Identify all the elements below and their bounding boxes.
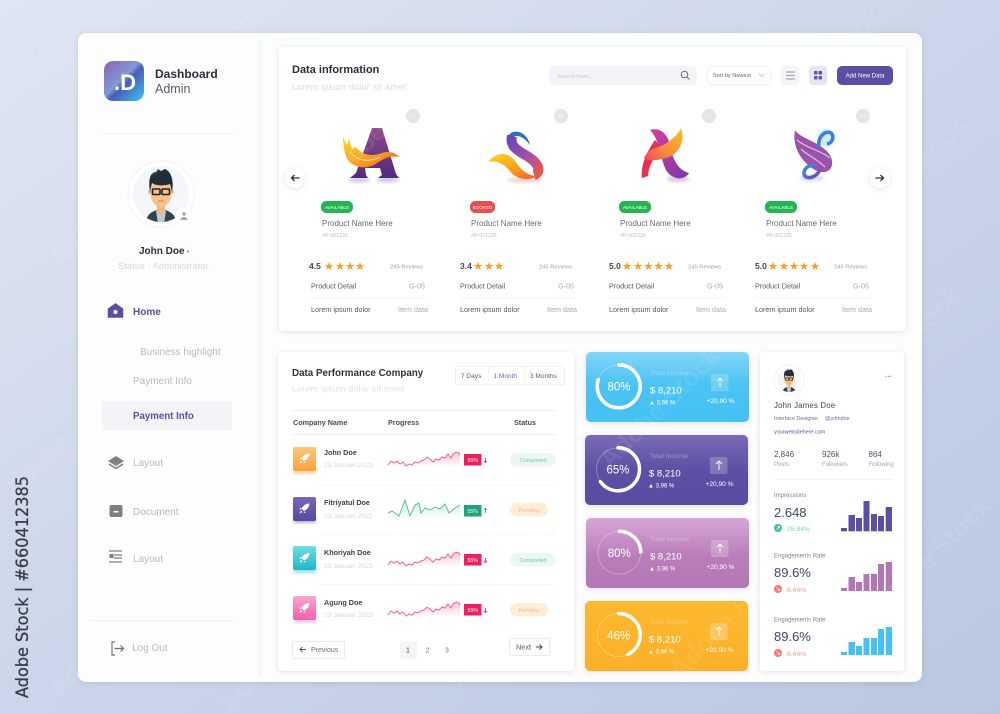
profile name: Status : Administrator	[118, 261, 209, 271]
ring gauge	[597, 614, 640, 656]
status badge	[470, 201, 495, 213]
nav: document: Document	[133, 507, 179, 518]
impressions metric	[774, 493, 892, 533]
ring gauge	[596, 448, 640, 491]
stock watermark: Adobe Stock	[663, 550, 797, 684]
detail rows: Product Detail	[609, 282, 655, 290]
income values: Total Income	[650, 453, 688, 460]
more button	[406, 109, 420, 123]
stock watermark: Adobe Stock	[838, 110, 972, 244]
rating: 245 Reviews	[390, 264, 423, 270]
next button: Next	[516, 642, 531, 652]
nav: layout: Layout	[133, 458, 163, 469]
sidebar	[90, 61, 233, 655]
rating: ★	[633, 259, 643, 273]
income values: ▲ 3,96 %	[649, 400, 676, 406]
change badge	[464, 554, 487, 566]
search box	[549, 66, 697, 85]
detail rows: Item data	[547, 305, 577, 314]
profile stats: 926k	[822, 450, 840, 459]
grid view button	[809, 66, 827, 85]
detail rows: G-05	[707, 282, 723, 290]
product name: Product Name Here	[766, 219, 837, 228]
bar chart	[841, 562, 892, 591]
rating: ★	[799, 259, 809, 273]
row: Khoriyah Doe: Khoriyah Doe	[324, 548, 371, 557]
product card 4	[755, 109, 872, 314]
row: Fitriyatul Doe	[293, 497, 548, 523]
log out	[112, 642, 168, 655]
product name: #R-001235	[620, 233, 646, 239]
rating: ★	[664, 259, 674, 273]
status badge: AVAILABLE	[769, 205, 793, 210]
more button	[856, 109, 870, 123]
more button	[702, 109, 716, 123]
sparkline	[388, 500, 460, 519]
product name: #R-001235	[322, 233, 348, 239]
rating: 245 Reviews	[539, 264, 572, 270]
detail rows	[311, 282, 428, 314]
stock watermark: Adobe Stock	[593, 340, 727, 474]
engagements metric blue	[774, 618, 892, 658]
rating: 5.0	[755, 261, 767, 271]
nav: home: Home	[133, 307, 161, 318]
product name: Product Name Here	[620, 219, 691, 228]
stock watermark: Adobe Stock	[398, 190, 532, 324]
product name	[471, 219, 542, 239]
detail rows: Product Detail	[311, 282, 357, 290]
nav: home	[108, 304, 161, 318]
profile name	[118, 246, 209, 271]
stock watermark: Adobe Stock	[443, 560, 577, 694]
income values: Total Income	[650, 536, 689, 543]
engagements metric purple	[774, 554, 892, 594]
panel: data information	[279, 47, 906, 331]
engagements metric purple: 89.6%	[774, 565, 811, 580]
rating: ★	[324, 259, 334, 273]
income card orange	[585, 601, 748, 671]
stock watermark: Adobe Stock	[863, 490, 997, 624]
detail rows: Lorem ipsum dolor	[311, 305, 371, 314]
rating: ★	[768, 259, 778, 273]
status badge: AVAILABLE	[325, 205, 349, 210]
income values: Total Income	[650, 370, 689, 377]
profile stats: Followers	[822, 462, 848, 468]
detail rows	[460, 282, 577, 314]
profile name: John Doe	[139, 246, 185, 257]
period tabs: 1 Month	[494, 373, 517, 380]
sparkline	[388, 552, 460, 567]
stock watermark: Adobe Stock	[373, 370, 507, 504]
income card purple	[585, 435, 748, 505]
detail rows: Item data	[696, 305, 726, 314]
engagements metric blue: 89.6%	[774, 629, 811, 644]
impressions metric: 26.84%	[787, 526, 810, 533]
sparkline	[388, 602, 460, 617]
row: Khoriyah Doe: 23 Januari 2022	[324, 563, 373, 570]
up button: +20,90 %	[706, 398, 735, 405]
status pill: Pending	[519, 608, 539, 614]
heading: Data Performance Company	[292, 368, 424, 379]
status badge	[765, 201, 797, 213]
nav: active payment info	[102, 401, 232, 430]
period tabs: 3 Months	[530, 373, 557, 380]
detail rows: Item data	[398, 305, 428, 314]
product card 2	[460, 109, 577, 314]
detail rows	[609, 282, 726, 314]
profile text: Interface Designer	[774, 416, 818, 422]
change badge	[464, 604, 487, 616]
pagination: 2	[426, 648, 430, 654]
carousel arrow right	[870, 168, 890, 188]
detail rows: G-05	[409, 282, 425, 290]
engagements metric blue: Engagements Rate	[774, 618, 826, 624]
profile avatar	[128, 161, 194, 227]
product card 3	[609, 109, 726, 314]
income values: $ 8,210	[649, 468, 681, 480]
profile stats	[774, 450, 894, 468]
rating: ★	[810, 259, 820, 273]
engagements metric blue: 8.64%	[787, 651, 806, 658]
row: Fitriyatul Doe: Fitriyatul Doe	[324, 498, 370, 507]
product name: #R-001235	[471, 233, 497, 239]
detail rows: G-05	[558, 282, 574, 290]
up button	[706, 374, 735, 405]
row: John Doe: John Doe	[324, 448, 357, 457]
profile stats: 864	[868, 450, 882, 459]
table header	[292, 410, 556, 434]
avatar	[774, 365, 804, 395]
status badge	[321, 201, 353, 213]
product name: #R-001235	[766, 233, 792, 239]
rating: 3.4	[460, 261, 472, 271]
product name	[322, 219, 393, 239]
rating: ★	[355, 259, 365, 273]
stock id vertical label: Adobe Stock | #660412385	[13, 476, 33, 698]
log out: Log Out	[132, 643, 168, 654]
ring gauge: 80%	[608, 548, 631, 560]
up button	[706, 457, 734, 488]
up button	[706, 623, 734, 654]
detail rows: G-05	[853, 282, 869, 290]
heading	[292, 368, 424, 394]
profile text: John James Doe	[774, 401, 835, 410]
previous button: Previous	[311, 647, 339, 654]
brand name: Dashboard	[155, 67, 218, 81]
rating	[609, 259, 721, 273]
profile text: yourwebsitehere.com	[774, 430, 826, 436]
brand name	[155, 67, 218, 96]
rating: 5.0	[609, 261, 621, 271]
logo S feather	[794, 129, 835, 181]
status pill	[510, 553, 556, 566]
stock watermark: Adobe Stock	[43, 570, 177, 704]
row: Khoriyah Doe	[293, 546, 556, 573]
rating	[309, 259, 423, 273]
stock watermark: Adobe Stock	[623, 130, 757, 264]
detail rows: Product Detail	[460, 282, 506, 290]
more button	[554, 109, 568, 123]
rating: ★	[494, 259, 504, 273]
panel: data performance company	[278, 352, 574, 671]
income values: $ 8,210	[650, 552, 682, 562]
status pill: Completed	[519, 458, 547, 464]
previous button	[292, 642, 344, 658]
logo A swoosh	[642, 128, 689, 182]
status pill	[510, 453, 556, 466]
detail rows	[755, 282, 872, 314]
logo	[104, 61, 144, 101]
row: Agung Doe: 23 Januari 2022	[324, 612, 373, 619]
detail rows: Product Detail	[755, 282, 801, 290]
search box: Search here...	[557, 74, 594, 80]
stock watermark: Adobe Stock	[173, 420, 307, 554]
company icon	[293, 447, 316, 474]
row: Agung Doe: Agung Doe	[324, 598, 362, 607]
rating: ★	[653, 259, 664, 273]
up button: +20,90 %	[706, 564, 735, 571]
status badge	[619, 201, 651, 213]
company icon	[293, 546, 316, 573]
rating: ★	[779, 259, 789, 273]
income card blue	[586, 352, 749, 422]
logo: .D	[114, 70, 136, 95]
status pill	[510, 603, 548, 616]
bar chart	[841, 627, 892, 655]
bar chart	[841, 501, 892, 531]
stock watermark: Adobe Stock	[833, 280, 967, 414]
rating: ★	[484, 259, 494, 273]
ring gauge: 80%	[607, 382, 631, 394]
rating	[460, 259, 572, 273]
engagements metric purple: Engagements Rate	[774, 554, 826, 560]
nav: layout	[108, 456, 163, 469]
impressions metric: 2.648	[774, 505, 807, 520]
period tabs: 7 Days	[461, 373, 482, 380]
engagements metric purple: 8.64%	[787, 587, 806, 594]
stock watermark: Adobe Stock	[523, 20, 657, 154]
add new data button: Add New Data	[846, 74, 885, 80]
nav: layout 2	[109, 551, 163, 565]
product name: Product Name Here	[471, 219, 542, 228]
pagination	[400, 641, 449, 659]
sort dropdown: Sort by Newest	[713, 73, 751, 79]
stock watermark: Adobe Stock	[43, 140, 177, 274]
income values	[649, 370, 689, 406]
profile text: @johndoe	[825, 416, 850, 422]
product name: Product Name Here	[322, 219, 393, 228]
heading	[292, 64, 406, 92]
rating: ★	[789, 259, 799, 273]
panel: profile statistics	[760, 352, 904, 671]
detail rows: Lorem ipsum dolor	[609, 305, 669, 314]
detail rows: Item data	[842, 305, 872, 314]
list view button	[781, 66, 799, 85]
change badge: 55%	[468, 509, 478, 515]
logo A	[343, 128, 400, 182]
income values	[648, 619, 688, 656]
product name	[620, 219, 691, 239]
nav: active payment info: Payment Info	[133, 411, 194, 422]
profile stats: Following	[868, 462, 894, 468]
nav: business highlight: Business highlight	[140, 347, 221, 358]
status pill: Completed	[519, 558, 547, 564]
sort dropdown	[708, 66, 770, 84]
status pill	[510, 503, 548, 516]
income values: ▲ 3,96 %	[648, 650, 675, 656]
stock watermark: Adobe Stock	[313, 60, 447, 194]
pagination: 3	[445, 648, 449, 654]
status badge: BOOKED	[473, 205, 493, 210]
product name	[766, 219, 837, 239]
nav: payment info: Payment Info	[133, 376, 192, 387]
detail rows: Lorem ipsum dolor	[755, 305, 815, 314]
income values: ▲ 3,96 %	[649, 566, 676, 572]
change badge: 55%	[468, 608, 478, 614]
up button	[706, 540, 735, 571]
heading: Data information	[292, 64, 380, 76]
table header: Status	[514, 418, 536, 427]
ring gauge: 46%	[607, 630, 630, 642]
rating: 245 Reviews	[834, 264, 867, 270]
rating: ★	[335, 259, 345, 273]
up button: +20,90 %	[706, 481, 734, 488]
status badge: AVAILABLE	[623, 205, 647, 210]
row: Fitriyatul Doe: 23 Januari 2022	[324, 513, 373, 520]
income values	[649, 536, 689, 572]
main dashboard panel	[78, 33, 922, 682]
rating: ★	[622, 259, 632, 273]
income values: $ 8,210	[649, 634, 681, 646]
table header: Progress	[388, 418, 419, 427]
detail rows: Lorem ipsum dolor	[460, 305, 520, 314]
profile stats: Posts	[774, 462, 789, 468]
rating: ★	[473, 259, 483, 273]
heading: Lorem ipsum dolor sit amet	[292, 384, 405, 394]
rating: 245 Reviews	[688, 264, 721, 270]
stock watermark: Adobe Stock	[0, 370, 132, 504]
company icon	[293, 596, 316, 623]
next button	[510, 638, 550, 656]
stock watermark: Adobe Stock	[753, 0, 887, 134]
ring gauge	[597, 365, 640, 408]
ring gauge	[598, 531, 641, 574]
change badge: 55%	[468, 458, 478, 464]
table header: Company Name	[293, 418, 347, 427]
nav: document	[110, 505, 179, 518]
add new data button	[837, 66, 893, 85]
rating: ★	[345, 259, 355, 273]
income values: ▲ 3,96 %	[648, 484, 675, 490]
carousel arrow left	[285, 168, 305, 188]
rating: 4.5	[309, 261, 321, 271]
income values	[648, 453, 688, 490]
income values: Total Income	[650, 619, 688, 626]
row: Agung Doe	[293, 596, 548, 623]
change badge	[464, 505, 487, 516]
income card mauve	[586, 518, 749, 588]
logo S	[488, 132, 543, 183]
ring gauge: 65%	[606, 464, 630, 476]
product card 1	[309, 109, 428, 314]
company icon	[293, 497, 316, 523]
impressions metric: Impressions	[774, 493, 806, 499]
change badge	[464, 454, 487, 466]
brand name: Admin	[155, 82, 190, 96]
period tabs	[456, 366, 564, 384]
sparkline	[388, 452, 460, 467]
change badge: 55%	[468, 558, 478, 564]
row: John Doe	[293, 447, 556, 474]
up button: +20,90 %	[706, 647, 734, 654]
income values: $ 8,210	[650, 386, 682, 396]
row: John Doe: 23 Januari 2022	[324, 462, 373, 469]
heading: Lorem ipsum dolor sit amet	[292, 82, 406, 92]
rating	[755, 259, 867, 273]
profile text	[774, 401, 850, 436]
rating: ★	[643, 259, 654, 273]
pagination: 1	[406, 648, 410, 654]
nav: layout 2: Layout	[133, 554, 163, 565]
menu dots: ...	[885, 370, 892, 379]
status pill: Pending	[519, 508, 539, 514]
profile stats: 2,846	[774, 450, 795, 459]
